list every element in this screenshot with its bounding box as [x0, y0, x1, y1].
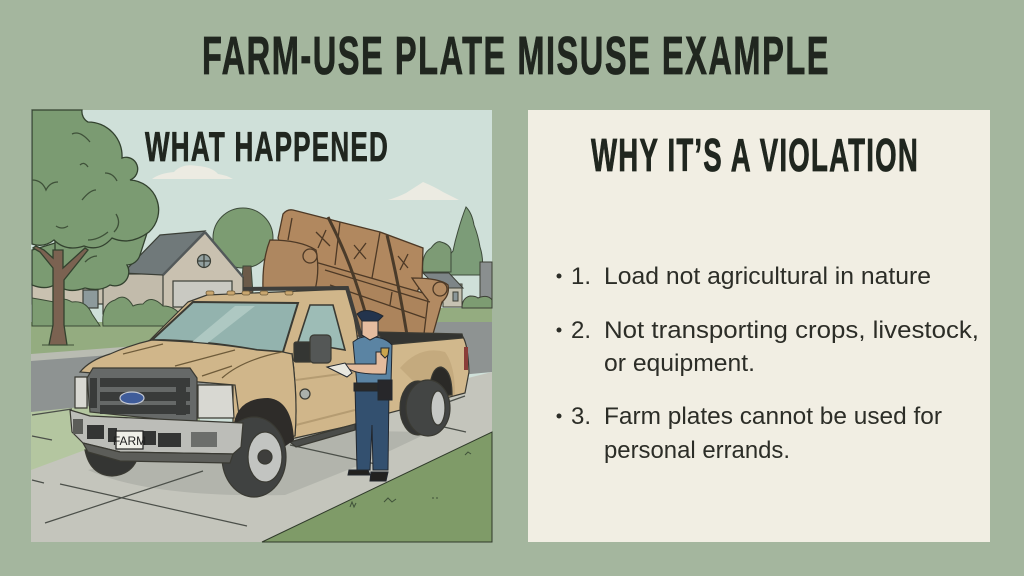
panel: what happened illustration	[31, 110, 492, 542]
door emblem	[300, 389, 310, 399]
lawn line at tree base	[42, 344, 74, 346]
sofa load	[263, 210, 448, 336]
ground: road, lawn, sidewalk, grass	[31, 322, 492, 542]
rear wheel	[400, 380, 450, 436]
list item 2: or equipment.	[604, 350, 755, 377]
windshield	[152, 302, 298, 352]
grille	[87, 368, 197, 423]
panel background	[528, 110, 990, 542]
list item 3	[556, 403, 942, 464]
heading: what happened: WHAT HAPPENED	[145, 123, 389, 170]
wheel arch	[233, 398, 294, 450]
grass tufts	[350, 452, 471, 507]
list item 1: 1.	[571, 263, 591, 290]
list item 3: 3.	[571, 403, 591, 430]
hood	[80, 340, 296, 445]
shrubs	[32, 297, 189, 326]
left wheel	[85, 450, 140, 476]
farm license plate: FARM	[113, 434, 146, 448]
police officer	[327, 310, 392, 481]
large tree	[32, 110, 159, 345]
headlights	[75, 377, 234, 418]
panel: why it's a violation	[528, 110, 990, 542]
pickup truck	[70, 288, 469, 497]
clouds	[152, 165, 459, 200]
truck bed	[355, 337, 469, 422]
front wheel	[222, 417, 286, 497]
background trees	[213, 207, 483, 294]
mirror	[294, 335, 331, 363]
cab and door	[90, 289, 358, 445]
list item 2: 2.	[571, 317, 591, 344]
list item 2: Not transporting crops, livestock,	[604, 317, 979, 344]
far lawn	[31, 308, 492, 358]
list item 1: Load not agricultural in nature	[604, 263, 931, 290]
side window	[298, 305, 345, 350]
list item 3: Farm plates cannot be used for	[604, 403, 942, 430]
list item 3: personal errands.	[604, 437, 790, 464]
bumper vents	[73, 419, 217, 447]
list item 2	[556, 317, 979, 377]
house	[32, 231, 243, 314]
running board	[290, 424, 355, 447]
small rear house	[423, 262, 492, 308]
bumper	[70, 410, 243, 454]
sky	[31, 110, 492, 542]
lower bumper	[83, 443, 233, 463]
